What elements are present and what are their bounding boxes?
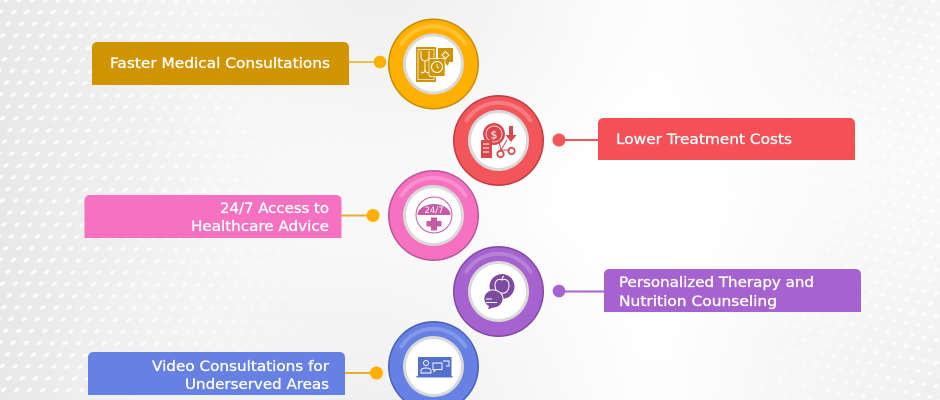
icon: coin, bill, down arrow and scissors: $ (490, 128, 498, 142)
icon: tablet, stethoscope and clock (416, 47, 453, 82)
icon: laptop video call (416, 357, 452, 378)
label box 3: Healthcare Advice (191, 219, 329, 235)
label box 3 (84, 195, 342, 238)
label box 5: Video Consultations for (152, 359, 329, 375)
item 4: Personalized Therapy and Nutrition Counseling (453, 246, 861, 337)
connector 2 (552, 134, 598, 146)
label box 1 (92, 42, 349, 85)
label box 5 (88, 352, 345, 395)
connector 3 (341, 209, 380, 222)
connector 4 (553, 285, 604, 297)
label box 2: Lower Treatment Costs (616, 132, 792, 148)
icon: 24/7 clock with medical cross (416, 197, 452, 233)
label box 2 (598, 118, 855, 160)
item 3: 24/7 Access to Healthcare Advice (84, 170, 479, 261)
label box 3: 24/7 Access to (220, 201, 329, 217)
item 2: Lower Treatment Costs (453, 95, 855, 186)
connector 5 (345, 366, 383, 380)
item 5: Video Consultations for Underserved Areas (88, 321, 479, 400)
ring 5 (388, 321, 479, 400)
label box 4: Nutrition Counseling (619, 294, 777, 310)
icon: speech bubbles with apple (484, 274, 514, 310)
item 1: Faster Medical Consultations (92, 18, 479, 110)
label box 5: Underserved Areas (185, 377, 329, 393)
label box 1: Faster Medical Consultations (110, 56, 330, 72)
icon: coin, bill, down arrow and scissors (481, 123, 516, 158)
icon: 24/7 clock with medical cross: 24/7 (424, 206, 444, 216)
ring 3 (388, 170, 479, 261)
label box 4 (604, 269, 861, 312)
label box 4: Personalized Therapy and (619, 275, 814, 291)
ring 4 (453, 246, 544, 337)
ring 1 (388, 18, 479, 110)
connector 1 (349, 56, 386, 68)
ring 2 (453, 95, 544, 186)
